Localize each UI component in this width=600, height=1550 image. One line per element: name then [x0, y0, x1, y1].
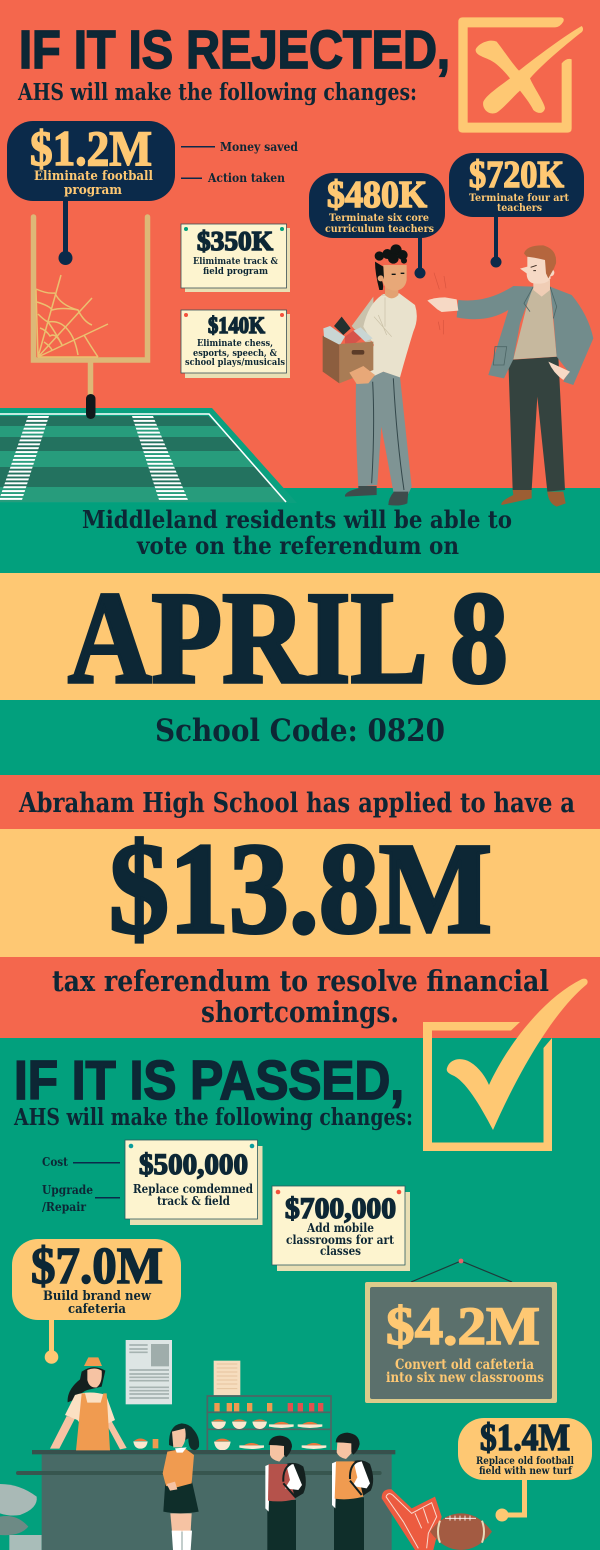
callout: $7.0M cafeteria	[12, 1238, 181, 1364]
legend: upgrade or repair: /Repair	[42, 1200, 87, 1214]
plant	[0, 1484, 42, 1550]
legend: upgrade or repair: Upgrade	[42, 1183, 93, 1197]
hanging sign: $4.2M classrooms: Convert old cafeteria	[395, 1357, 534, 1373]
callout: $1.2M football	[7, 120, 175, 265]
counter	[16, 1450, 395, 1550]
callout: $1.4M turf: field with new turf	[479, 1466, 573, 1477]
note: $350K track: Elimimate track &	[193, 256, 278, 267]
legend: money saved: Money saved	[220, 140, 299, 154]
text: school code: School Code: 0820	[155, 713, 445, 749]
hanging sign: $4.2M classrooms: $4.2M	[386, 1296, 540, 1356]
date: April 8: APRIL 8	[68, 564, 508, 711]
football field	[0, 408, 297, 503]
illustration: pointing man	[427, 245, 593, 507]
text: voting intro: Middleland residents will be able to	[82, 505, 512, 534]
legend: money saved	[181, 140, 299, 154]
legend: action taken: Action taken	[207, 171, 285, 185]
cobweb	[36, 275, 108, 357]
hanging sign: $4.2M classrooms	[365, 1259, 557, 1403]
text: voting intro	[82, 505, 512, 560]
boy student with red vest	[265, 1436, 306, 1550]
note: $500,000 track: $500,000	[139, 1148, 248, 1181]
note: $500,000 track: track & field	[157, 1194, 231, 1208]
note: $700,000 mobile classrooms: classes	[320, 1244, 361, 1258]
note: $140K activities	[181, 310, 290, 378]
legend: cost: Cost	[42, 1155, 68, 1169]
illustration: dismissed teacher with box	[323, 244, 417, 506]
cook	[50, 1357, 127, 1450]
note: $350K track	[181, 224, 290, 292]
menu sheet	[214, 1361, 240, 1395]
foam finger	[382, 1489, 442, 1550]
note: $140K activities: school plays/musicals	[185, 357, 285, 368]
callout: $480K core teachers: Terminate six core	[329, 212, 429, 224]
girl student	[163, 1423, 199, 1550]
text: tax referendum purpose: shortcomings.	[201, 995, 399, 1029]
legend: action taken	[181, 171, 285, 185]
goal post with cobweb	[34, 217, 148, 419]
callout: $1.4M turf: Replace old football	[476, 1456, 574, 1467]
note: $350K track: $350K	[197, 226, 273, 256]
spiky curly hair	[375, 244, 408, 290]
text: tax referendum purpose	[52, 964, 549, 1029]
icon: crossed box	[458, 17, 583, 133]
illustration: foam finger and football	[382, 1489, 492, 1550]
callout: $480K core teachers: curriculum teachers	[325, 223, 434, 235]
note: $140K activities: $140K	[208, 313, 265, 338]
callout: $720K art teachers: Terminate four art	[469, 192, 569, 204]
subtitle: passed changes: AHS will make the following changes:	[13, 1104, 413, 1131]
note: $700,000 mobile classrooms: classrooms for art	[286, 1233, 394, 1247]
subtitle: rejected changes: AHS will make the following changes:	[17, 79, 417, 106]
legend: cost	[42, 1155, 120, 1169]
callout: $1.4M turf	[458, 1417, 592, 1522]
legend: upgrade or repair	[42, 1183, 120, 1214]
hanging sign: $4.2M classrooms: into six new classrooms	[386, 1370, 544, 1386]
callout: $720K art teachers	[449, 153, 584, 268]
note: $140K activities: Eliminate chess,	[197, 338, 273, 349]
callout: $720K art teachers: teachers	[497, 202, 542, 214]
callout: $7.0M cafeteria: Build brand new	[43, 1289, 152, 1304]
icon: checked box	[423, 979, 588, 1151]
callout: $7.0M cafeteria: cafeteria	[68, 1302, 127, 1317]
note: $700,000 mobile classrooms: Add mobile	[306, 1221, 374, 1235]
post padding	[86, 394, 96, 419]
note: $500,000 track	[125, 1140, 262, 1225]
callout: $1.4M turf: $1.4M	[480, 1417, 570, 1459]
title: if it is rejected: IF IT IS REJECTED,	[19, 20, 450, 80]
callout: $720K art teachers: $720K	[469, 154, 564, 196]
illustration: cafeteria scene	[0, 1340, 395, 1550]
counter food	[133, 1438, 158, 1449]
food shelf	[207, 1396, 331, 1451]
callout: $480K core teachers: $480K	[327, 174, 427, 216]
note: $350K track: field program	[203, 266, 268, 277]
callout: $1.2M football: program	[64, 183, 122, 198]
football	[430, 1513, 492, 1550]
title: if it is passed: IF IT IS PASSED,	[14, 1049, 404, 1111]
note: $500,000 track: Replace comdemned	[133, 1182, 254, 1196]
callout: $480K core teachers	[309, 173, 445, 278]
callout: $1.2M football: $1.2M	[30, 120, 152, 176]
text: voting intro: vote on the referendum on	[136, 531, 459, 560]
note: $700,000 mobile classrooms	[272, 1186, 410, 1271]
amount: $13.8M: $13.8M	[109, 817, 492, 961]
boy student with orange vest	[332, 1433, 373, 1550]
wall poster	[126, 1340, 172, 1404]
note: $700,000 mobile classrooms: $700,000	[285, 1192, 396, 1225]
callout: $7.0M cafeteria: $7.0M	[31, 1238, 163, 1295]
note: $140K activities: esports, speech, &	[193, 348, 277, 359]
callout: $1.2M football: Eliminate football	[34, 169, 153, 184]
